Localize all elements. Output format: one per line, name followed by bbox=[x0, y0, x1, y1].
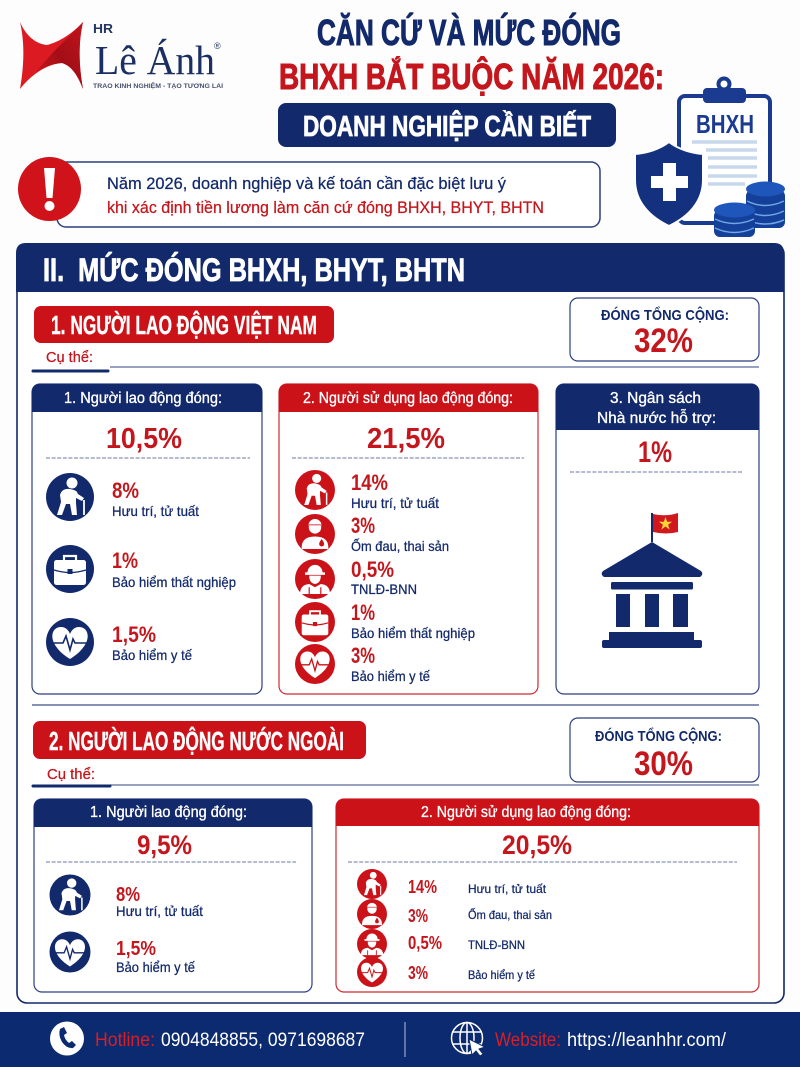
card: foreign employer contribution: 20,5% bbox=[502, 830, 572, 860]
website: Website: bbox=[495, 1030, 561, 1051]
logo: HR Lê Ánh: HR bbox=[93, 21, 114, 36]
icon: exclamation bbox=[18, 157, 81, 221]
row: health bbox=[295, 643, 430, 684]
row: occupational accident: 0,5% bbox=[351, 557, 394, 582]
row: sickness, maternity: Ốm đau, thai sản bbox=[351, 537, 449, 554]
website: https://leanhhr.com/ bbox=[567, 1030, 727, 1051]
subtitle pill: DOANH NGHIỆP CẦN BIẾT bbox=[303, 109, 591, 143]
card: employer contribution bbox=[279, 384, 538, 694]
section 2 sub label: Cụ thể: bbox=[47, 766, 95, 783]
footer bbox=[0, 1012, 800, 1067]
row: occupational accident: TNLĐ-BNN bbox=[468, 938, 525, 952]
row: health bbox=[46, 618, 192, 666]
main panel bbox=[16, 243, 784, 1003]
subtitle pill bbox=[278, 103, 616, 147]
row: unemployment bbox=[295, 600, 475, 642]
row: pension: Hưu trí, tử tuất bbox=[112, 503, 199, 519]
hotline: Hotline: bbox=[95, 1030, 155, 1051]
row: health: Bảo hiểm y tế bbox=[116, 959, 195, 975]
row: health: 1,5% bbox=[112, 622, 156, 647]
icon: government building with flag bbox=[602, 513, 702, 648]
row: occupational accident bbox=[357, 929, 525, 959]
row: pension: 14% bbox=[351, 470, 388, 495]
coin stacks bbox=[714, 182, 785, 237]
section 1 heading: 1. NGƯỜI LAO ĐỘNG VIỆT NAM bbox=[51, 310, 317, 340]
title: CĂN CỨ VÀ MỨC ĐÓNG bbox=[317, 11, 621, 53]
alert callout: khi xác định tiền lương làm căn cứ đóng BHXH, BHYT, BHTN bbox=[107, 198, 544, 217]
section 2 total: 30% bbox=[634, 745, 693, 783]
website bbox=[495, 1030, 727, 1051]
row: pension: 14% bbox=[408, 877, 437, 897]
card: employee contribution: 10,5% bbox=[106, 423, 182, 455]
section 1 total: 32% bbox=[634, 322, 693, 360]
alert callout: Năm 2026, doanh nghiệp và kế toán cần đặc biệt lưu ý bbox=[107, 174, 506, 193]
row: health bbox=[357, 957, 535, 987]
row: pension: Hưu trí, tử tuất bbox=[351, 495, 439, 511]
card: foreign employee contribution bbox=[34, 799, 312, 992]
row: health bbox=[50, 932, 195, 975]
card: employer contribution: 2. Người sử dụng lao động đóng: bbox=[303, 390, 513, 407]
card: state budget bbox=[556, 384, 759, 694]
row: health: 3% bbox=[408, 963, 428, 983]
card: state budget: Nhà nước hỗ trợ: bbox=[597, 408, 716, 427]
clipboard: BHXH bbox=[696, 109, 754, 139]
section 1 heading bbox=[34, 306, 334, 343]
card: employer contribution: 21,5% bbox=[367, 423, 445, 455]
card: foreign employee contribution: 9,5% bbox=[137, 830, 192, 860]
alert callout bbox=[18, 157, 600, 227]
row: unemployment bbox=[46, 545, 236, 593]
row: unemployment: Bảo hiểm thất nghiệp bbox=[112, 574, 236, 590]
section 1 total bbox=[570, 298, 759, 361]
row: sickness, maternity: 3% bbox=[408, 906, 428, 926]
row: pension: Hưu trí, tử tuất bbox=[116, 903, 203, 919]
section 2 total: ĐÓNG TỔNG CỘNG: bbox=[595, 727, 722, 745]
card: foreign employee contribution: 1. Người lao động đóng: bbox=[90, 804, 247, 821]
row: health: 1,5% bbox=[116, 938, 156, 960]
logo: HR Lê Ánh: ® bbox=[214, 41, 221, 51]
clipboard bbox=[679, 78, 770, 223]
row: sickness, maternity bbox=[295, 513, 449, 554]
row: pension bbox=[46, 473, 199, 521]
card: foreign employer contribution bbox=[336, 799, 759, 992]
logo: HR Lê Ánh: TRAO KINH NGHIỆM - TẠO TƯƠNG LAI bbox=[93, 82, 223, 90]
card: employee contribution: 1. Người lao động đóng: bbox=[64, 390, 222, 407]
row: pension: Hưu trí, tử tuất bbox=[468, 882, 547, 896]
section 2 heading: 2. NGƯỜI LAO ĐỘNG NƯỚC NGOÀI bbox=[49, 726, 344, 756]
card: state budget: 1% bbox=[638, 436, 672, 469]
hotline: 0904848855, 0971698687 bbox=[161, 1030, 365, 1051]
row: unemployment: Bảo hiểm thất nghiệp bbox=[351, 625, 475, 641]
icon: phone bbox=[50, 1022, 84, 1056]
row: health: Bảo hiểm y tế bbox=[112, 647, 192, 663]
panel heading: II. MỨC ĐÓNG BHXH, BHYT, BHTN bbox=[43, 252, 465, 288]
section 2 total bbox=[570, 718, 759, 783]
row: sickness, maternity: Ốm đau, thai sản bbox=[468, 907, 552, 922]
card: state budget: 3. Ngân sách bbox=[610, 390, 701, 407]
row: pension bbox=[50, 874, 203, 919]
section 1 total: ĐÓNG TỔNG CỘNG: bbox=[601, 306, 729, 324]
logo mark bbox=[20, 22, 83, 89]
row: occupational accident: TNLĐ-BNN bbox=[351, 581, 417, 597]
row: pension bbox=[357, 869, 547, 899]
icon: globe with cursor bbox=[452, 1022, 485, 1056]
logo: HR Lê Ánh bbox=[20, 21, 223, 90]
row: health: 3% bbox=[351, 643, 375, 668]
row: pension: 8% bbox=[112, 478, 139, 503]
row: unemployment: 1% bbox=[112, 548, 138, 573]
title bbox=[279, 11, 664, 97]
card: employee contribution bbox=[32, 384, 262, 694]
illustration: clipboard, shield, coins bbox=[635, 78, 785, 237]
panel heading bbox=[16, 243, 784, 292]
logo: HR Lê Ánh: Lê Ánh bbox=[95, 37, 215, 83]
row: sickness, maternity: 3% bbox=[351, 513, 375, 538]
row: occupational accident: 0,5% bbox=[408, 933, 442, 953]
row: health: Bảo hiểm y tế bbox=[351, 668, 430, 684]
row: unemployment: 1% bbox=[351, 600, 375, 625]
row: sickness, maternity bbox=[357, 899, 552, 929]
card: foreign employer contribution: 2. Người sử dụng lao động đóng: bbox=[421, 804, 631, 821]
shield bbox=[635, 142, 703, 226]
section 2 heading bbox=[33, 721, 366, 759]
row: occupational accident bbox=[295, 557, 417, 599]
section 1 sub label: Cụ thể: bbox=[46, 349, 93, 366]
row: pension bbox=[295, 470, 439, 511]
title: BHXH BẮT BUỘC NĂM 2026: bbox=[279, 55, 664, 97]
row: pension: 8% bbox=[116, 884, 140, 906]
row: health: Bảo hiểm y tế bbox=[468, 968, 535, 982]
